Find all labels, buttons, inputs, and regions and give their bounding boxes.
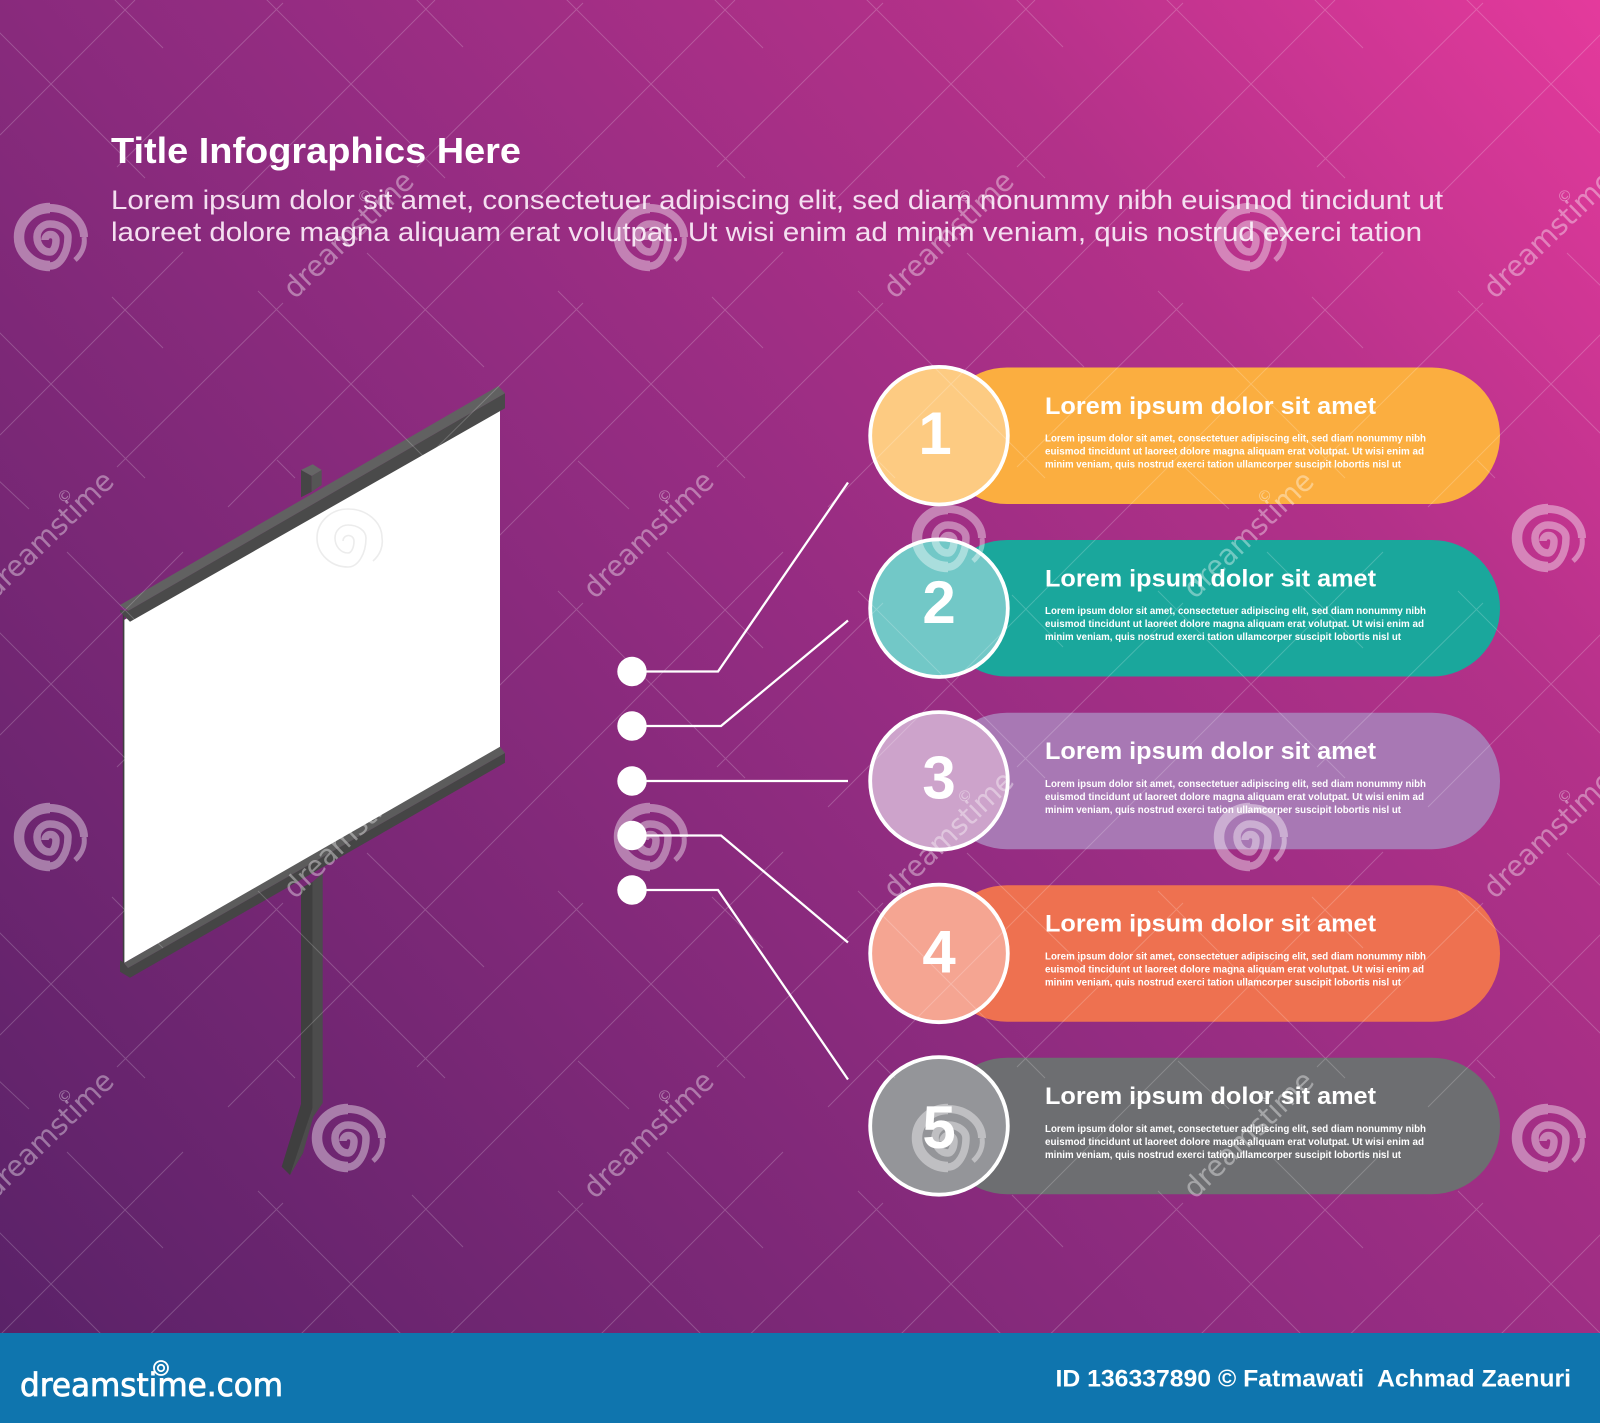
leader lines: [632, 482, 848, 1080]
item 1: orange pill: Lorem ipsum dolor sit amet: [1045, 393, 1376, 420]
item 2: teal pill: minim veniam, quis nostrud exerci tation ullamcorper suscipit lobortis nisl ut: [1045, 631, 1401, 643]
faint spiral on screen: [317, 509, 382, 567]
bottom roller bar: [120, 747, 505, 978]
item 4: coral pill: [870, 885, 1500, 1022]
stand pole with foot: [282, 873, 323, 1175]
item 2: teal pill: Lorem ipsum dolor sit amet: [1045, 566, 1376, 592]
top roller bar: [120, 386, 505, 622]
title: Title Infographics Here: [111, 130, 521, 171]
item 5: grey pill: Lorem ipsum dolor sit amet, consectetuer adipiscing elit, sed diam nonummy nibh: [1045, 1123, 1426, 1135]
intro text block: Lorem ipsum dolor sit amet, consectetuer adipiscing elit, sed diam nonummy nibh euismod tincidunt ut: [111, 185, 1444, 215]
connector: dots and leader lines: [617, 482, 848, 1080]
illustration: projector screen on stand: [120, 386, 505, 1175]
item 3: purple pill: Lorem ipsum dolor sit amet: [1045, 738, 1376, 765]
watermark spirals: [19, 208, 1582, 1167]
top peg: [301, 464, 322, 497]
item 1: orange pill: minim veniam, quis nostrud exerci tation ullamcorper suscipit lobortis nisl ut: [1045, 459, 1401, 471]
item 1: orange pill: Lorem ipsum dolor sit amet, consectetuer adipiscing elit, sed diam nonummy nibh: [1045, 433, 1426, 445]
item 5: grey pill: euismod tincidunt ut laoreet dolore magna aliquam erat volutpat. Ut wisi enim ad: [1045, 1136, 1424, 1148]
intro text block: [111, 185, 1444, 247]
item 4: coral pill: euismod tincidunt ut laoreet dolore magna aliquam erat volutpat. Ut wisi enim ad: [1045, 963, 1424, 975]
image credit: ID 136337890 © Fatmawati Achmad Zaenuri: [1056, 1366, 1571, 1393]
item 5: grey pill: Lorem ipsum dolor sit amet: [1045, 1083, 1376, 1110]
white projection surface: [124, 410, 500, 963]
footer banner: [0, 1333, 1600, 1423]
item 2: teal pill: [870, 539, 1500, 677]
item 4: coral pill: 4: [922, 918, 956, 986]
item 5: grey pill: minim veniam, quis nostrud exerci tation ullamcorper suscipit lobortis nisl ut: [1045, 1149, 1401, 1161]
item 2: teal pill: euismod tincidunt ut laoreet dolore magna aliquam erat volutpat. Ut wisi enim ad: [1045, 618, 1424, 630]
screen left edge: [123, 612, 124, 964]
item 3: purple pill: euismod tincidunt ut laoreet dolore magna aliquam erat volutpat. Ut wisi enim ad: [1045, 791, 1424, 803]
item 4: coral pill: minim veniam, quis nostrud exerci tation ullamcorper suscipit lobortis nisl ut: [1045, 976, 1401, 988]
item 3: purple pill: 3: [922, 744, 956, 812]
item 4: coral pill: Lorem ipsum dolor sit amet, consectetuer adipiscing elit, sed diam nonummy nibh: [1045, 950, 1426, 962]
item 3: purple pill: Lorem ipsum dolor sit amet, consectetuer adipiscing elit, sed diam nonummy nibh: [1045, 778, 1426, 790]
item 4: coral pill: Lorem ipsum dolor sit amet: [1045, 911, 1376, 938]
item 5: grey pill: 5: [922, 1094, 956, 1161]
item 3: purple pill: minim veniam, quis nostrud exerci tation ullamcorper suscipit lobortis nisl ut: [1045, 804, 1401, 816]
item 2: teal pill: 2: [922, 569, 956, 636]
item 1: orange pill: 1: [918, 400, 952, 467]
item 1: orange pill: euismod tincidunt ut laoreet dolore magna aliquam erat volutpat. Ut wisi enim ad: [1045, 446, 1424, 458]
footer logo: dreamstime.com: [20, 1366, 283, 1404]
item 1: orange pill: [870, 367, 1500, 505]
intro text block: laoreet dolore magna aliquam erat volutpat. Ut wisi enim ad minim veniam, quis nostrud exerci tation: [111, 217, 1422, 247]
dots: [617, 657, 647, 905]
item 5: grey pill: [870, 1057, 1500, 1195]
item 3: purple pill: [870, 712, 1500, 850]
watermark text: [0, 158, 1600, 1205]
item 2: teal pill: Lorem ipsum dolor sit amet, consectetuer adipiscing elit, sed diam nonummy nibh: [1045, 605, 1426, 617]
